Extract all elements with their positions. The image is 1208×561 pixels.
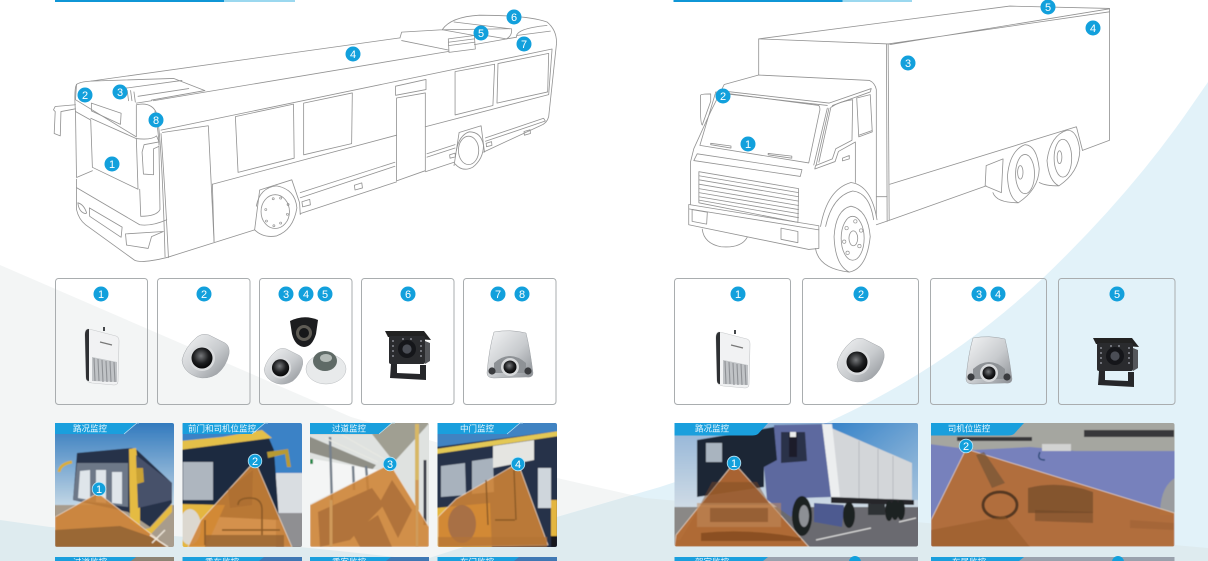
photo: road monitoring (truck) bbox=[672, 421, 920, 549]
marker 4: 4 bbox=[350, 49, 356, 61]
label bbox=[931, 423, 1024, 436]
marker: 1 bbox=[731, 458, 737, 470]
marker 1 bbox=[740, 136, 756, 152]
marker 3 bbox=[900, 56, 916, 70]
marker 2 bbox=[716, 88, 730, 104]
label: 路况监控 bbox=[695, 424, 729, 434]
marker 5 bbox=[474, 26, 488, 40]
bus line drawing bbox=[54, 15, 557, 261]
marker 3: 3 bbox=[905, 58, 911, 70]
background: lower left band bbox=[0, 520, 430, 561]
label: 中门监控 bbox=[460, 424, 494, 434]
bus device card 1 bbox=[56, 278, 148, 404]
photo: aisle monitoring bbox=[308, 421, 431, 549]
truck line drawing bbox=[689, 6, 1110, 272]
bus device card 4 bbox=[362, 278, 454, 404]
marker 3 bbox=[112, 84, 128, 100]
bus device card 3: 3 bbox=[283, 289, 289, 301]
photo: driver monitoring (truck) bbox=[929, 421, 1177, 549]
truck device card 2 bbox=[802, 278, 918, 404]
label: 过道监控 bbox=[332, 424, 366, 434]
header bar: right bbox=[674, 0, 912, 2]
header bar: left bbox=[55, 0, 295, 2]
marker 2 bbox=[78, 88, 92, 102]
photo: middle door monitoring bbox=[436, 421, 559, 549]
marker 5 bbox=[1040, 0, 1056, 14]
background: blended overlap bbox=[429, 496, 1208, 561]
bus device card 5: 8 bbox=[519, 289, 525, 301]
bus device card 2 bbox=[158, 278, 250, 404]
marker 7 bbox=[516, 36, 532, 52]
marker 1: 1 bbox=[745, 139, 751, 151]
bus device card 2: 2 bbox=[201, 289, 207, 301]
truck device card 3: 4 bbox=[995, 289, 1001, 301]
truck device card 4 bbox=[1058, 278, 1175, 404]
bus camera markers bbox=[78, 10, 532, 172]
marker 2: 2 bbox=[82, 90, 88, 102]
marker 4 bbox=[1086, 20, 1100, 36]
bus device card 5: 7 bbox=[495, 289, 501, 301]
bus device card 3: 5 bbox=[322, 289, 328, 301]
marker: 2 bbox=[963, 441, 969, 453]
white dome camera bbox=[306, 351, 346, 384]
marker 4 bbox=[346, 46, 360, 62]
marker bbox=[727, 456, 741, 470]
truck device card 1 bbox=[674, 278, 790, 404]
marker 3: 3 bbox=[117, 87, 123, 99]
truck device card 4: 5 bbox=[1114, 289, 1120, 301]
label: 前门和司机位监控 bbox=[188, 424, 256, 434]
marker: 1 bbox=[96, 484, 102, 496]
truck camera markers bbox=[716, 0, 1100, 152]
marker: 4 bbox=[515, 459, 521, 471]
marker 6: 6 bbox=[511, 12, 517, 24]
label: 司机位监控 bbox=[948, 424, 991, 434]
background: grey wave bbox=[0, 265, 1208, 561]
truck device card 1: 1 bbox=[735, 289, 741, 301]
truck device card 2: 2 bbox=[858, 289, 864, 301]
bus device card 5 bbox=[464, 278, 556, 404]
marker 2: 2 bbox=[720, 91, 726, 103]
truck device card 3 bbox=[930, 278, 1046, 404]
black dome camera bbox=[290, 317, 318, 347]
label bbox=[674, 423, 768, 436]
bus device card 3 bbox=[260, 278, 352, 404]
marker 5: 5 bbox=[1045, 2, 1051, 14]
marker: 3 bbox=[387, 459, 393, 471]
truck device card 3: 3 bbox=[976, 289, 982, 301]
silver dome camera bbox=[264, 348, 303, 384]
second photo row: clipped strip, bus bbox=[55, 557, 557, 561]
marker 1 bbox=[104, 156, 120, 172]
label: 路况监控 bbox=[73, 424, 107, 434]
marker: 2 bbox=[252, 456, 258, 468]
second photo row: clipped strip, truck bbox=[674, 556, 1174, 561]
bus device card 3: 4 bbox=[303, 289, 309, 301]
marker 5: 5 bbox=[478, 28, 484, 40]
background: light blue swoosh bbox=[420, 82, 1208, 561]
marker bbox=[959, 439, 973, 453]
photo: road monitoring (bus) bbox=[53, 421, 176, 549]
bus device card 4: 6 bbox=[405, 289, 411, 301]
marker 6 bbox=[506, 10, 522, 24]
marker 8: 8 bbox=[153, 115, 159, 127]
marker 4: 4 bbox=[1090, 23, 1096, 35]
marker 1: 1 bbox=[109, 159, 115, 171]
bus device card 1: 1 bbox=[98, 289, 104, 301]
marker 7: 7 bbox=[521, 39, 527, 51]
marker 8 bbox=[148, 112, 164, 128]
photo: front door and driver monitoring bbox=[179, 421, 304, 549]
